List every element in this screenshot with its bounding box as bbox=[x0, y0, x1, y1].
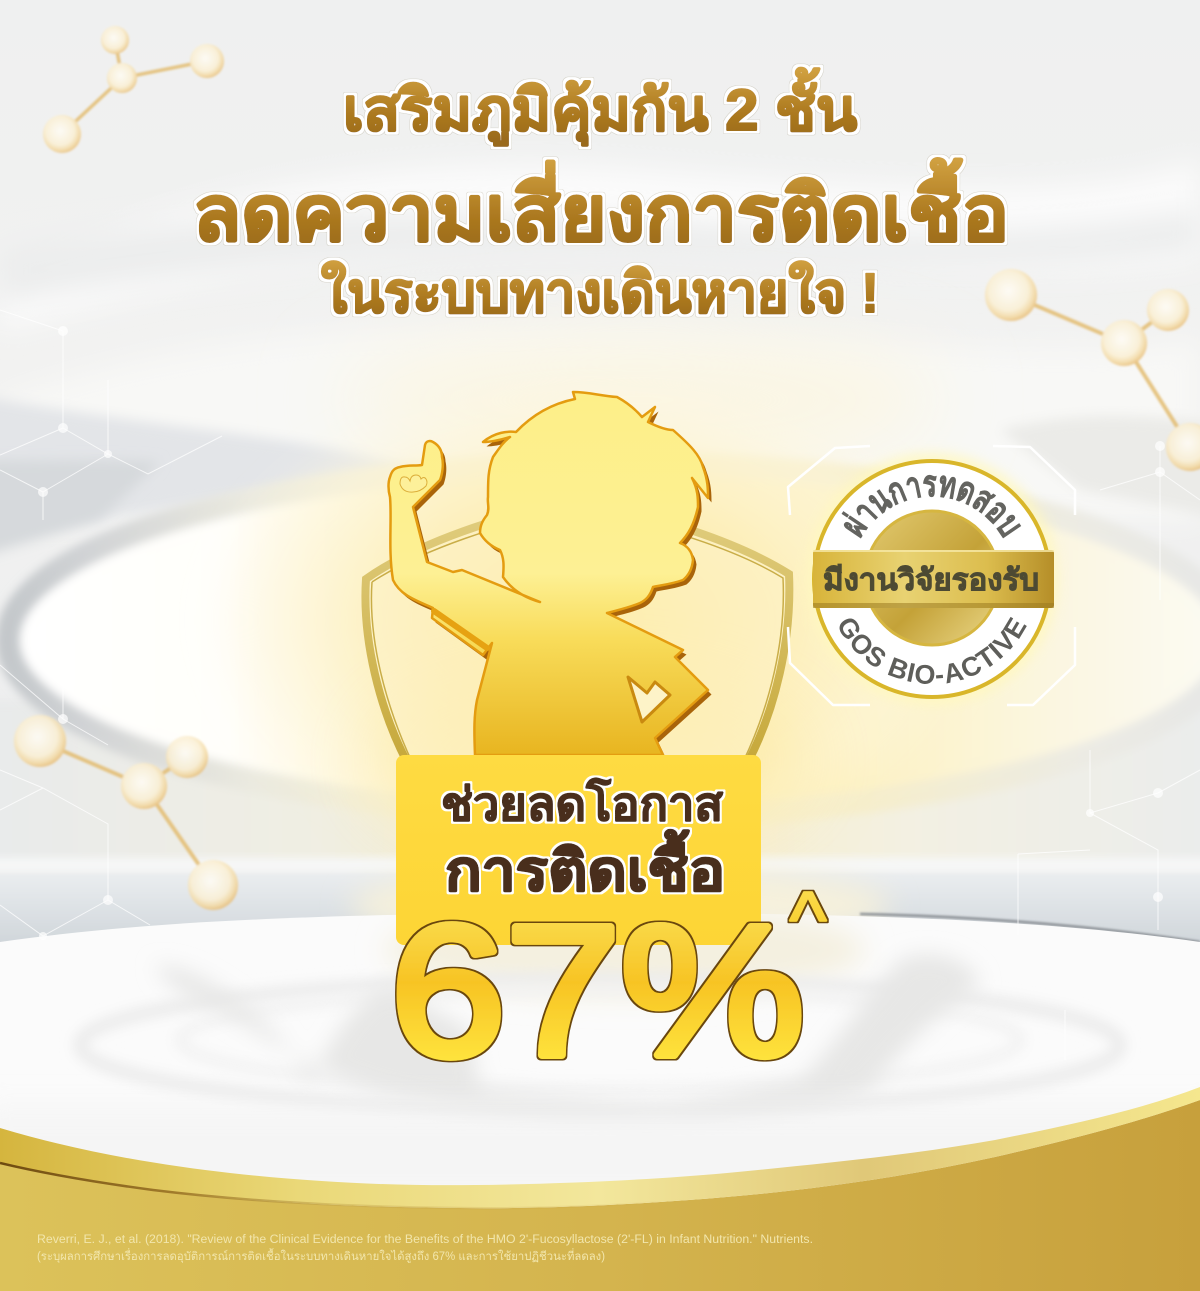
badge bbox=[786, 445, 1076, 706]
badge band bbox=[813, 550, 1054, 608]
badge corner brackets bbox=[788, 446, 1075, 705]
title bbox=[193, 68, 1009, 324]
molecule: top left bbox=[43, 26, 224, 153]
badge top arc text: ผ่านการทดสอบ bbox=[842, 474, 1022, 538]
title line 2: ลดความเสี่ยงการติดเชื้อ bbox=[193, 158, 1009, 257]
caret footnote mark: ^ bbox=[790, 875, 827, 963]
badge band text: มีงานวิจัยรองรับ bbox=[823, 564, 1039, 597]
title line 1: เสริมภูมิคุ้มกัน 2 ชั้น bbox=[343, 68, 857, 147]
callout text line 2: การติดเชื้อ bbox=[445, 830, 725, 902]
shield bbox=[365, 498, 789, 762]
yellow callout box bbox=[396, 755, 761, 945]
badge glow bbox=[806, 453, 1058, 705]
molecule: left bbox=[14, 715, 238, 910]
badge bottom arc text: GOS BIO-ACTIVE bbox=[840, 616, 1027, 684]
footer reference text bbox=[37, 1234, 813, 1263]
title line 3: ในระบบทางเดินหายใจ ! bbox=[321, 260, 879, 324]
badge coin bbox=[865, 511, 999, 645]
boy silhouette bbox=[388, 392, 712, 760]
badge ring bbox=[814, 461, 1050, 697]
footer reference text: Reverri, E. J., et al. (2018). "Review of the Clinical Evidence for the Benefits of the HMO 2'-Fucosyllactose (2'-FL) in Infant Nutrition." Nutrients. bbox=[37, 1234, 813, 1246]
footer reference text: (ระบุผลการศึกษาเรื่องการลดอุบัติการณ์การติดเชื้อในระบบทางเดินหายใจได้สูงถึง 67% และการใช้ยาปฏิชีวนะที่ลดลง) bbox=[37, 1248, 605, 1263]
molecule: top right bbox=[985, 269, 1200, 471]
footer gold wave bbox=[0, 1087, 1200, 1291]
callout text line 1: ช่วยลดโอกาส bbox=[441, 777, 724, 830]
big number 67%: 67% bbox=[390, 888, 804, 1095]
